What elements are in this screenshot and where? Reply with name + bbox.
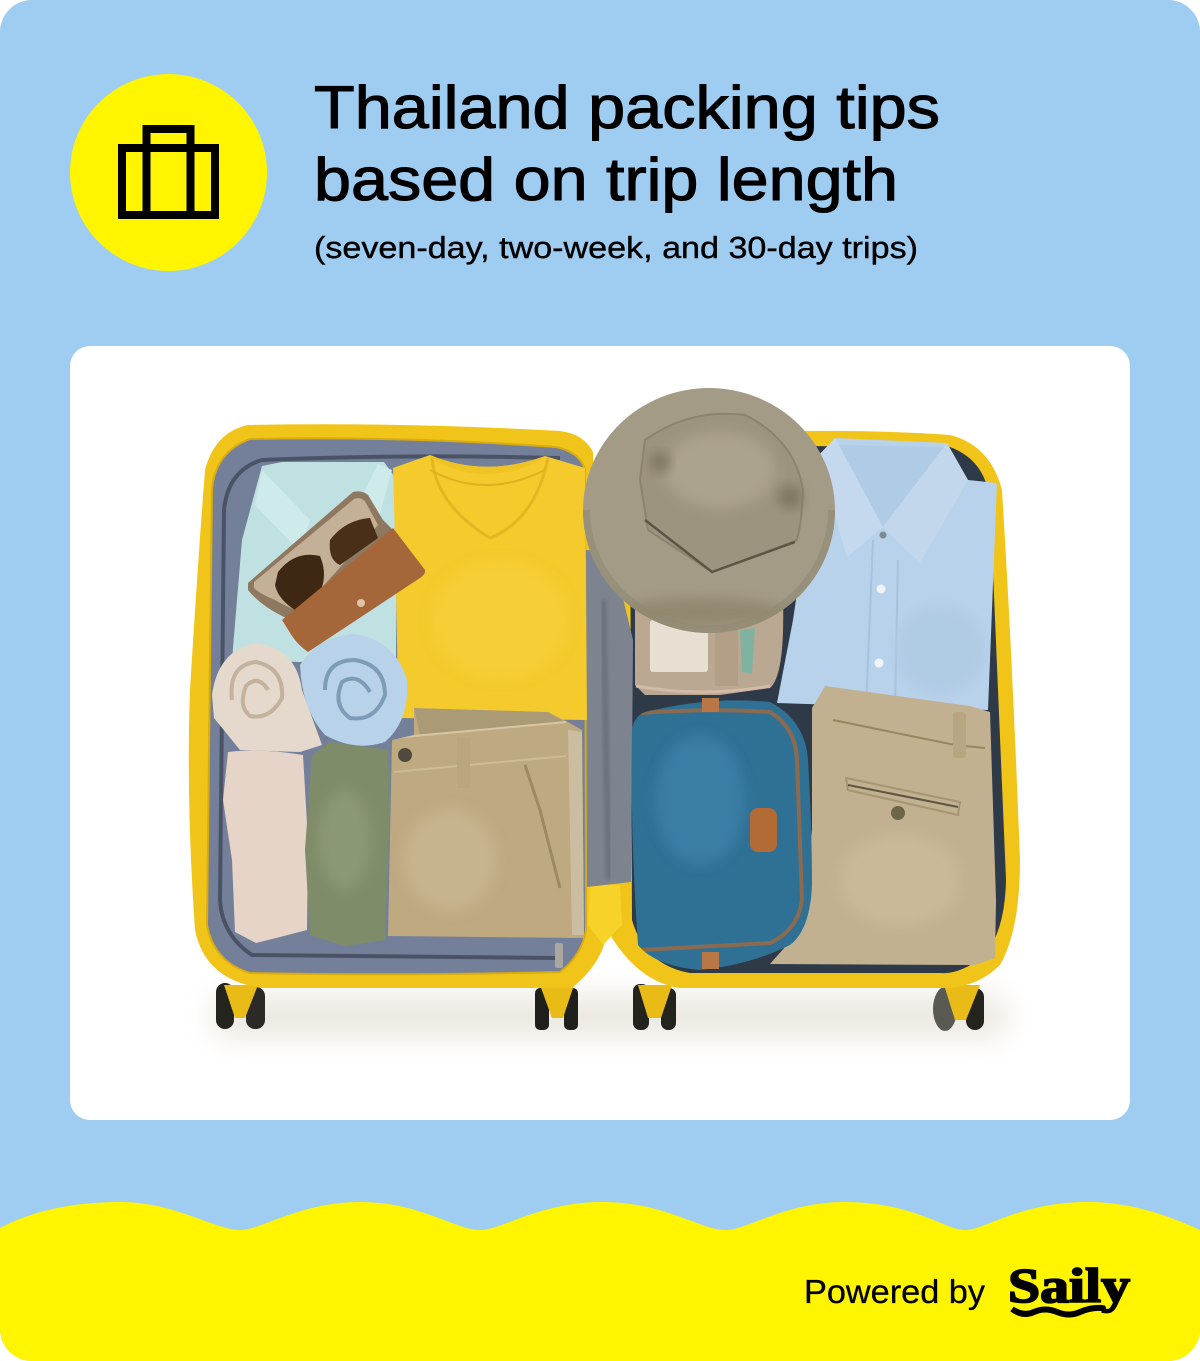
rolled blue scarf [300, 634, 407, 746]
left chino trousers [388, 708, 584, 938]
rolled beige scarf [212, 643, 322, 752]
sunglasses case [248, 491, 425, 652]
right chino trousers [770, 686, 996, 965]
centre divider [586, 550, 633, 887]
Saily logo: Saily [1008, 1258, 1131, 1313]
lining zipper seam [220, 456, 560, 958]
suitcase right shell [600, 430, 1020, 988]
icon: yellow circle with suitcase [70, 74, 267, 271]
title [314, 74, 940, 213]
mesh pouch [635, 600, 783, 695]
suitcase zipper pull [555, 943, 563, 968]
folded green cloth [305, 742, 390, 946]
photo panel: packed suitcase [70, 346, 1130, 1120]
mint shirt [232, 462, 397, 662]
light blue shirt [777, 438, 997, 710]
powered by label: Powered by [804, 1273, 986, 1310]
floor shadow [215, 995, 1005, 1037]
hat [583, 388, 835, 633]
folded pink cloth [223, 751, 308, 943]
title: Thailand packing tips [314, 74, 940, 141]
yellow t-shirt [393, 450, 587, 720]
suitcase right lining [630, 445, 1006, 973]
suitcase left lining [207, 438, 586, 974]
Saily logo [1010, 1267, 1130, 1318]
blue toiletry bag [632, 698, 812, 970]
suitcase left shell [189, 424, 606, 988]
subtitle: (seven-day, two-week, and 30-day trips) [314, 230, 918, 265]
suitcase hinge [588, 885, 622, 945]
yellow wave footer [0, 1202, 1200, 1361]
title: based on trip length [314, 146, 898, 213]
wheels [216, 983, 984, 1031]
